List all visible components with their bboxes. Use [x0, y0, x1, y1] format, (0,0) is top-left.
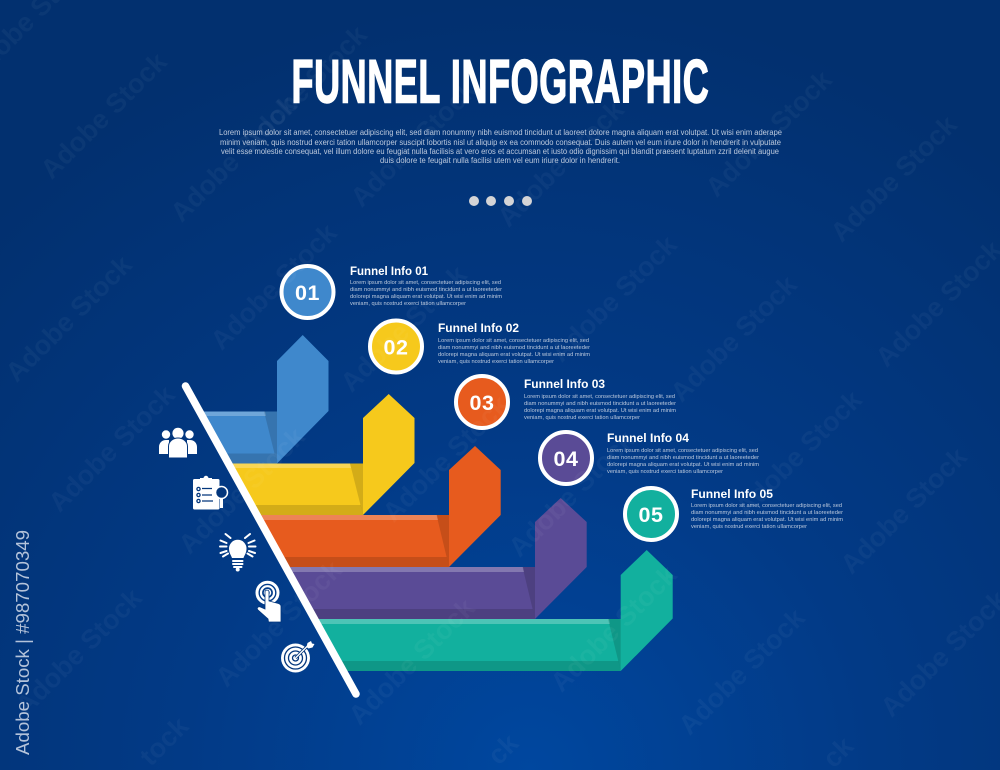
watermark pattern: ck	[482, 727, 525, 770]
text block: funnel info 02: veniam, quis nostrud exerci tation ullamcorper	[438, 359, 554, 365]
icon: light bulb	[220, 534, 256, 572]
watermark pattern: Adobe Stock	[730, 384, 868, 523]
text block: funnel info 02: Funnel Info 02	[438, 323, 519, 335]
watermark pattern: Adobe Stock	[205, 217, 343, 356]
funnel band 01: blue	[200, 335, 328, 464]
step badge 02: 02	[384, 336, 408, 360]
text block: funnel info 04: diam nonummyi and nibh euismod tincidunt a ut laoreeteder	[607, 455, 759, 461]
funnel band 05: teal	[314, 550, 673, 671]
watermark pattern: Adobe Stock	[673, 602, 811, 741]
icon: people	[159, 428, 197, 458]
watermark pattern: Adobe Stock	[343, 592, 481, 731]
watermark pattern: Adobe Stock	[173, 421, 311, 560]
text block: funnel info 03: diam nonummyi and nibh euismod tincidunt a ut laoreeteder	[524, 401, 676, 407]
stock credit: Adobe Stock | #987070349	[13, 530, 33, 755]
funnel divider line	[186, 386, 356, 694]
pagination dots	[469, 196, 532, 206]
funnel band 03: orange	[257, 446, 501, 567]
watermark pattern: Adobe Stock	[210, 554, 348, 693]
watermark pattern: Adobe Stock	[345, 74, 483, 213]
step badge 03	[456, 376, 508, 428]
watermark pattern: Adobe Stock	[503, 424, 641, 563]
funnel band 02: yellow	[229, 394, 414, 515]
watermark pattern: Adobe Stock	[700, 64, 838, 203]
text block: funnel info 04: Lorem ipsum dolor sit amet, consectetuer adipiscing elit, sed	[607, 448, 758, 454]
watermark pattern: Adobe Stock	[10, 582, 148, 721]
watermark pattern: Adobe Stock	[835, 441, 973, 580]
text block: funnel info 02: dolorepi magna aliquam erat volutpat. Ut wisi enim ad minim	[438, 352, 590, 358]
text block: funnel info 01: Lorem ipsum dolor sit amet, consectetuer adipiscing elit, sed	[350, 280, 501, 286]
icon: touch hand	[257, 582, 281, 622]
watermark pattern: Adobe Stock	[492, 94, 630, 233]
text block: funnel info 02: diam nonummyi and nibh euismod tincidunt a ut laoreeteder	[438, 345, 590, 351]
icon: target with arrow	[281, 641, 314, 672]
text block: funnel info 03: Lorem ipsum dolor sit amet, consectetuer adipiscing elit, sed	[524, 394, 675, 400]
text block: funnel info 04: veniam, quis nostrud exerci tation ullamcorper	[607, 469, 723, 475]
text block: funnel info 05: diam nonummyi and nibh euismod tincidunt a ut laoreeteder	[691, 510, 843, 516]
watermark pattern: Adobe Stock	[825, 109, 963, 248]
text block: funnel info 02	[438, 323, 590, 365]
step badge 02	[370, 320, 422, 372]
step badge 04: 04	[554, 447, 578, 471]
watermark pattern: Adobe Stock	[165, 89, 303, 228]
watermark pattern: Adobe Stock	[545, 229, 683, 368]
intro paragraph: Lorem ipsum dolor sit amet, consectetuer adipiscing elit, sed diam nonummy nibh euismod tincidunt ut laoreet dolore magna aliquam erat volutpat. Ut wisi enim aderape	[219, 128, 783, 137]
intro paragraph: duis dolore te feugait nulla facilisi utem vel eum iriure dolor in hendrerit.	[380, 156, 620, 165]
step badge 01	[282, 266, 334, 318]
text block: funnel info 05: Funnel Info 05	[691, 489, 774, 501]
text block: funnel info 04: dolorepi magna aliquam erat volutpat. Ut wisi enim ad minim	[607, 462, 759, 468]
title: FUNNEL INFOGRAPHIC	[292, 48, 709, 116]
watermark pattern: Adobe Stock	[35, 46, 173, 185]
watermark pattern: Adobe Stock	[43, 379, 181, 518]
watermark pattern: Adobe Stock	[545, 559, 683, 698]
text block: funnel info 01: veniam, quis nostrud exerci tation ullamcorper	[350, 301, 466, 307]
step badge 04	[540, 432, 592, 484]
watermark pattern: Adobe Stock	[235, 19, 373, 158]
watermark pattern: Adobe Stock	[0, 249, 138, 388]
funnel chart	[186, 335, 673, 694]
text block: funnel info 01: dolorepi magna aliquam erat volutpat. Ut wisi enim ad minim	[350, 294, 502, 300]
text block: funnel info 01: diam nonummyi and nibh euismod tincidunt a ut laoreeteder	[350, 287, 502, 293]
text block: funnel info 03: veniam, quis nostrud exerci tation ullamcorper	[524, 415, 640, 421]
intro paragraph	[219, 128, 783, 165]
watermark pattern: Adobe Stock	[335, 259, 473, 398]
text block: funnel info 03: Funnel Info 03	[524, 379, 605, 391]
intro paragraph: velit esse molestie consequat, vel illum dolore eu feugiat nulla facilisis at vero eros et accumsan et iusto odio dignissim qui blandit praesent luptatum zzril delenit augue	[221, 147, 780, 156]
icon: clipboard with magnifier	[193, 476, 228, 510]
text block: funnel info 01	[350, 266, 502, 307]
text block: funnel info 04	[607, 433, 759, 475]
text block: funnel info 04: Funnel Info 04	[607, 433, 690, 445]
step badge 03: 03	[470, 391, 494, 415]
watermark pattern: Adobe Stock	[377, 389, 515, 528]
step badge 01: 01	[295, 281, 320, 305]
intro paragraph: minim veniam, quis nostrud exerci tation ullamcorper suscipit lobortis nisl ut aliquip ex ea commodo consequat. Duis autem vel eum iriure dolor in hendrerit in vulputate	[220, 138, 782, 147]
funnel band 04: purple	[286, 498, 587, 619]
text block: funnel info 03	[524, 379, 676, 421]
text block: funnel info 05: Lorem ipsum dolor sit amet, consectetuer adipiscing elit, sed	[691, 503, 842, 509]
step badge 05	[625, 488, 677, 540]
text block: funnel info 05: dolorepi magna aliquam erat volutpat. Ut wisi enim ad minim	[691, 517, 843, 523]
step badge 05: 05	[639, 503, 663, 527]
text block: funnel info 03: dolorepi magna aliquam erat volutpat. Ut wisi enim ad minim	[524, 408, 676, 414]
text block: funnel info 05	[691, 489, 843, 530]
text block: funnel info 02: Lorem ipsum dolor sit amet, consectetuer adipiscing elit, sed	[438, 338, 589, 344]
text block: funnel info 05: veniam, quis nostrud exerci tation ullamcorper	[691, 524, 807, 530]
watermark pattern: Adobe Stock	[665, 269, 803, 408]
watermark pattern: tock	[134, 710, 195, 770]
text block: funnel info 01: Funnel Info 01	[350, 266, 429, 278]
